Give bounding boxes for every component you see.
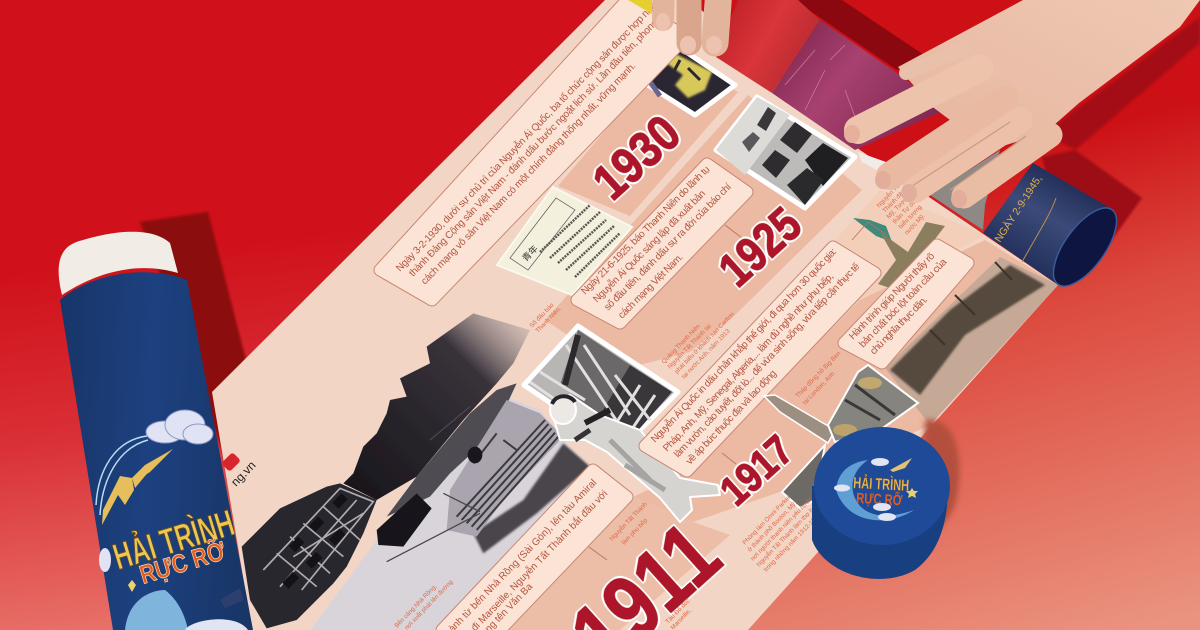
photo: sepia London harbour bbox=[885, 257, 1058, 425]
photo: 1925 building bbox=[716, 97, 855, 208]
captions: 1925 and 1930: Nguyễn Tất Thành tại bbox=[666, 323, 713, 370]
logo: waves bbox=[836, 460, 914, 520]
far bank trees bbox=[343, 313, 530, 500]
photo: Omni Parker House, Boston bbox=[782, 445, 825, 508]
poster sheet bbox=[212, 0, 1058, 630]
caption: Parker House: Phòng làm Omni Parker bbox=[741, 494, 792, 546]
connector: 1911 bbox=[589, 547, 607, 560]
building bbox=[242, 483, 377, 628]
roll: magenta section bbox=[772, 20, 945, 150]
caption: Big Ben: Tháp đồng hồ Big Ben bbox=[794, 350, 843, 399]
icon: flight trails bbox=[96, 436, 148, 515]
caption: Parker House: ở thành phố Boston, Mỹ, bbox=[746, 500, 799, 553]
captions: 1925 and 1930: phát biểu ở khách sạn Carlton bbox=[673, 311, 736, 375]
year: 1917: 1917 bbox=[711, 426, 802, 514]
photo: Big Ben and Parliament bbox=[764, 365, 918, 443]
shadow of left tube bbox=[140, 212, 246, 460]
caption: Amiral ship: Tàu Đô đốc bbox=[664, 598, 692, 625]
building arcade shadows bbox=[282, 493, 348, 589]
logo: website mark bbox=[221, 452, 259, 489]
caption: Statue of Liberty: thần Tự do bbox=[891, 198, 918, 225]
ship funnel bbox=[468, 447, 482, 463]
text box: 1930: Ngày 3-2-1930, dưới sự chủ trì của Nguyễn Ái Quốc, ba tổ chức cộng sản được hợp nhất bbox=[393, 0, 661, 274]
text box: 1917: làm vườn, cào tuyết, đốt lò... để vừa sinh sống, vừa tiếp cận thực tế bbox=[671, 260, 863, 460]
yellow poster corner bbox=[628, 0, 652, 14]
newspaper: Thanh Niên first issue bbox=[497, 187, 632, 295]
caption: Quảng Châu: Quảng Thanh Niên bbox=[660, 323, 702, 365]
caption: Nguyễn Tất Thành kitchen: làm phụ bếp bbox=[620, 517, 649, 546]
text box: hành trình: bản chất bóc lột toàn cầu của bbox=[857, 256, 950, 350]
ship rigging bbox=[387, 407, 480, 562]
caption: Parker House: nơi người thanh niên yêu nước bbox=[749, 496, 814, 562]
band: 1917 bbox=[633, 240, 1058, 522]
text box: 1925: Nguyễn Ái Quốc sáng lập đã xuất bản bbox=[590, 187, 708, 305]
paper curl behind the hand bbox=[858, 150, 1000, 230]
text box: hành trình: Hành trình giúp Người thấy rõ bbox=[847, 250, 937, 342]
left hand fingers bbox=[656, 0, 722, 54]
band: 1911 bbox=[505, 497, 730, 630]
caption: Thanh Niên issue: Số đầu báo bbox=[528, 301, 556, 329]
band: 1917 upper tone bbox=[625, 190, 985, 490]
band: 1925 bbox=[545, 95, 862, 370]
photo: Statue of Liberty bbox=[853, 218, 945, 290]
cylinder shadow bbox=[920, 420, 960, 534]
text box: hành trình: chủ nghĩa thực dân. bbox=[868, 294, 930, 357]
tube cap: left bbox=[59, 232, 178, 295]
captions: 1925 and 1930: Thanh Niên. bbox=[534, 305, 563, 334]
logo: bird bbox=[890, 458, 912, 472]
figure: woman bbox=[550, 395, 720, 522]
logo: star bbox=[906, 488, 918, 498]
tube: Hải Trình Rực Rỡ bbox=[60, 272, 253, 630]
caption: Parker House: trong những năm 1912-1913 bbox=[762, 511, 823, 573]
caption: Statue of Liberty: Thành đã bbox=[881, 190, 905, 214]
caption: Statue of Liberty: nước Mỹ. bbox=[903, 212, 927, 236]
roll text: date: NGÀY 2-9-1945, bbox=[992, 173, 1045, 245]
shadows of roll and hand bbox=[794, 0, 1200, 270]
caption: photo of the ship: Bến cảng Nhà Rồng, bbox=[393, 583, 439, 629]
logo: subtitle: RỰC RỠ bbox=[856, 489, 903, 509]
text box: 1917: về áp bức thuộc địa và lao động bbox=[683, 368, 779, 467]
text box: 1925: số đầu tiên, đánh dấu sự ra đời của báo chí bbox=[602, 181, 734, 313]
caption: Big Ben: tại London, Anh bbox=[801, 370, 837, 406]
caption: photo of the ship: nơi xuất phát lên đường bbox=[403, 578, 455, 630]
harbour photograph bbox=[242, 313, 590, 630]
building arches bbox=[263, 488, 373, 590]
photo: 1930 event bbox=[640, 41, 735, 115]
text box: 1917: Pháp, Anh, Mỹ, Senegal, Algeria,... làm đủ nghề như phụ bếp, bbox=[660, 271, 836, 454]
roll: red section bbox=[716, 0, 820, 93]
captions: 1925 and 1930: tại nước Anh, năm 1913 bbox=[680, 327, 732, 380]
quay strip bbox=[387, 383, 517, 517]
rolled poster bbox=[716, 0, 945, 150]
photo: Boston street with young Nguyễn Tất Thành bbox=[524, 326, 720, 522]
dark river shore bbox=[473, 443, 590, 553]
icon: cloud bbox=[146, 410, 213, 444]
ship deck bbox=[447, 400, 563, 537]
logo: website mark: ng.vn bbox=[228, 458, 259, 489]
year: 1930: 1930 bbox=[582, 104, 691, 210]
ship hull stripes bbox=[457, 420, 558, 530]
caption: Statue of Liberty: Mỹ, Tượng bbox=[885, 193, 912, 220]
caption: Statue of Liberty: Nguyễn Tất bbox=[875, 181, 903, 209]
right hand bbox=[844, 0, 1200, 208]
text box: 1930: thành Đảng Cộng sản Việt Nam - đánh dấu bước ngoặt lịch sử. Lần đầu tiên, phong trào bbox=[407, 3, 674, 279]
connector: 1925 bbox=[725, 225, 742, 238]
text box: 1930: cách mạng vô sản Việt Nam có một chính đảng thống nhất, vững mạnh. bbox=[419, 60, 638, 287]
water bbox=[310, 393, 590, 630]
caption: Parker House: Nguyễn Tất Thành làm thợ bánh bbox=[755, 499, 823, 568]
quay boat bbox=[377, 493, 432, 547]
text box: 1925: cách mạng Việt Nam. bbox=[616, 252, 686, 321]
title: Rực Rỡ: RỰC RỠ bbox=[136, 535, 230, 590]
text box: 1925 bbox=[577, 164, 747, 323]
connector: statue bbox=[852, 222, 888, 240]
icon: golden bird bbox=[102, 449, 173, 525]
illustration: waves and ship bbox=[99, 548, 248, 630]
title: Hải Trình: HẢI TRÌNH bbox=[108, 502, 239, 578]
captions: 1925 and 1930 bbox=[528, 301, 736, 380]
text box: hành trình bbox=[844, 245, 968, 363]
navy cylinder with logo bbox=[812, 427, 950, 579]
newspaper: Thanh Niên first issue: 青年 bbox=[520, 243, 540, 263]
text box: 1917: Nguyễn Ái Quốc in dấu chân khắp thế giới, đi qua hơn 30 quốc gia: bbox=[648, 245, 839, 445]
connector: 1917 bbox=[722, 453, 736, 464]
logo: title: HẢI TRÌNH bbox=[853, 473, 910, 495]
band: 1930 bbox=[558, 60, 738, 216]
caption: Statue of Liberty bbox=[875, 181, 927, 236]
caption: Statue of Liberty: biểu tượng bbox=[897, 203, 924, 230]
caption: Nguyễn Tất Thành kitchen: Nguyễn Tất Thành bbox=[608, 500, 649, 542]
rolled poster: navy end bbox=[983, 163, 1128, 296]
year: 1925: 1925 bbox=[709, 198, 812, 297]
text box: 1925: Ngày 21-6-1925, báo Thanh Niên do lãnh tụ bbox=[579, 164, 712, 297]
logo: clouds bbox=[834, 458, 896, 521]
